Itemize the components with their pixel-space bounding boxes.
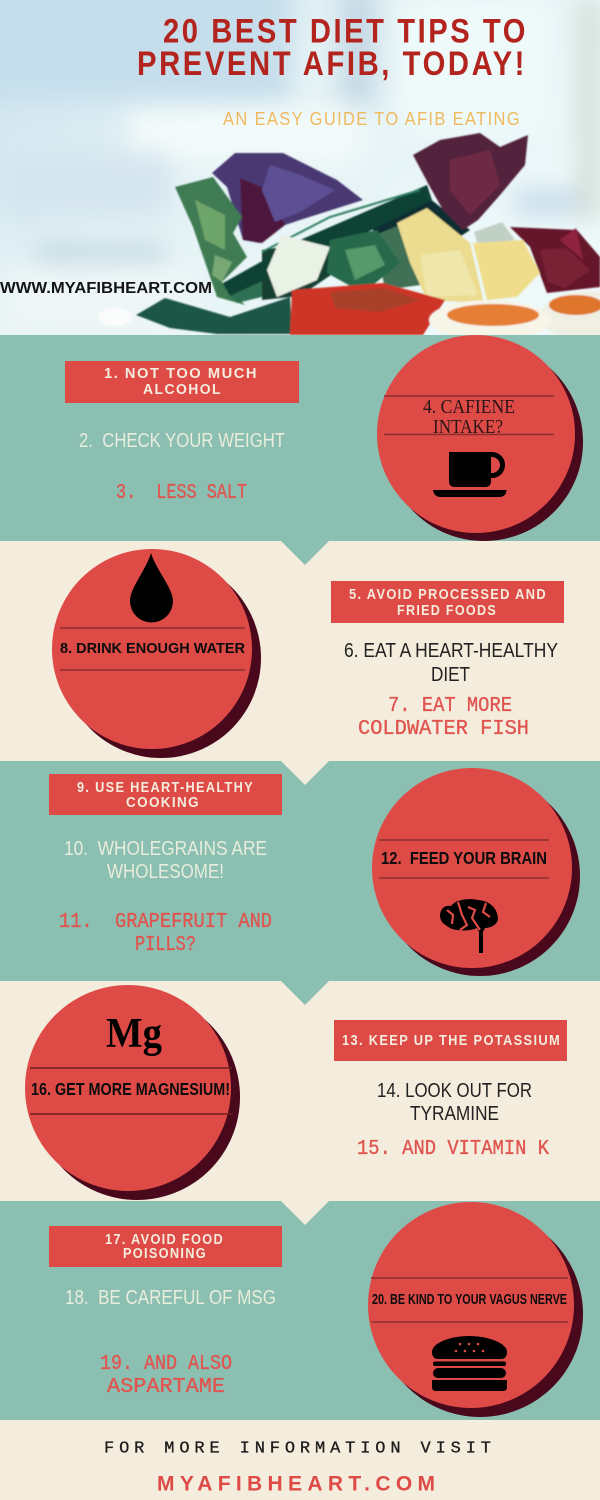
arrow: section pointer	[281, 1201, 329, 1225]
circle: tip 8 water	[52, 549, 261, 758]
tip 13 banner: 13. KEEP UP THE POTASSIUM	[342, 1033, 561, 1049]
tip 11	[59, 911, 272, 957]
icon: coffee cup	[433, 452, 506, 497]
subtitle: AN EASY GUIDE TO AFIB EATING	[223, 109, 521, 129]
tip 15: 15. AND VITAMIN K	[357, 1138, 549, 1161]
header photo: salad on a plate	[0, 0, 600, 341]
tip 7: COLDWATER FISH	[358, 718, 529, 741]
tip 1 banner: 1. NOT TOO MUCH	[104, 366, 258, 382]
icon: brain tree	[440, 899, 498, 953]
website label: WWW.MYAFIBHEART.COM	[0, 280, 212, 297]
panel: tips 1-4	[0, 335, 600, 541]
tip 10	[64, 838, 267, 883]
tip 19: 19. AND ALSO	[100, 1353, 232, 1376]
panel: tips 5-8	[0, 541, 600, 761]
circle: tip 12 brain	[372, 768, 580, 976]
tip 6: DIET	[431, 664, 470, 686]
panel: footer	[0, 1420, 600, 1500]
panel: tips 9-12	[0, 761, 600, 981]
tip 14: 14. LOOK OUT FOR	[377, 1080, 532, 1102]
circle: tip 16 magnesium	[25, 985, 240, 1200]
tip 7: 7. EAT MORE	[388, 695, 512, 718]
tip 6: 6. EAT A HEART-HEALTHY	[344, 640, 558, 662]
circle: tip 4 caffeine	[377, 335, 583, 541]
tip 19: ASPARTAME	[107, 1376, 225, 1399]
tip 9 banner	[49, 774, 282, 815]
tip 11: 11. GRAPEFRUIT AND	[59, 911, 272, 934]
tip 10: 10. WHOLEGRAINS ARE	[64, 838, 267, 860]
circle: tip 12 brain: 12. FEED YOUR BRAIN	[381, 848, 547, 868]
icon: water drop	[130, 553, 173, 622]
tip 5 banner	[331, 581, 564, 623]
panel: tips 13-16	[0, 981, 600, 1201]
tip 17 banner	[49, 1226, 282, 1267]
tip 2: 2. CHECK YOUR WEIGHT	[79, 430, 285, 452]
title	[138, 18, 524, 80]
circle: tip 20 vagus nerve	[368, 1202, 583, 1417]
circle: tip 4 caffeine: 4. CAFIENE	[423, 396, 515, 418]
panel: tips 17-20	[0, 1201, 600, 1420]
tip 7	[358, 695, 529, 741]
tip 3: 3. LESS SALT	[116, 482, 247, 505]
tip 6	[344, 640, 558, 686]
tip 19	[100, 1353, 232, 1399]
arrow: section pointer	[281, 541, 329, 565]
circle: tip 8 water: 8. DRINK ENOUGH WATER	[60, 640, 245, 657]
tip 14	[377, 1080, 532, 1125]
arrow: section pointer	[281, 981, 329, 1005]
tip 11: PILLS?	[135, 934, 196, 957]
footer caption: FOR MORE INFORMATION VISIT	[104, 1440, 491, 1458]
icon: burger	[432, 1336, 507, 1391]
tip 17 banner: 17. AVOID FOOD	[105, 1232, 224, 1248]
footer URL: MYAFIBHEART.COM	[157, 1472, 435, 1496]
tip 14: TYRAMINE	[410, 1103, 499, 1125]
circle: tip 16 magnesium: 16. GET MORE MAGNESIUM!	[31, 1079, 230, 1099]
tip 5 banner: FRIED FOODS	[397, 603, 497, 619]
circle: tip 4 caffeine: INTAKE?	[433, 416, 503, 438]
title: PREVENT AFIB, TODAY!	[137, 45, 527, 83]
tip 13 banner	[334, 1020, 567, 1061]
tip 9 banner: COOKING	[126, 795, 200, 811]
tip 18: 18. BE CAREFUL OF MSG	[65, 1287, 276, 1309]
arrow: section pointer	[281, 761, 329, 785]
tip 10: WHOLESOME!	[107, 861, 224, 883]
icon: Mg symbol: Mg	[106, 1011, 162, 1057]
tip 5 banner: 5. AVOID PROCESSED AND	[349, 587, 547, 603]
title: 20 BEST DIET TIPS TO	[163, 12, 528, 50]
tip 1 banner: ALCOHOL	[143, 382, 222, 398]
tip 17 banner: POISONING	[123, 1246, 207, 1262]
tip 1 banner	[65, 361, 299, 403]
tip 9 banner: 9. USE HEART-HEALTHY	[77, 780, 254, 796]
